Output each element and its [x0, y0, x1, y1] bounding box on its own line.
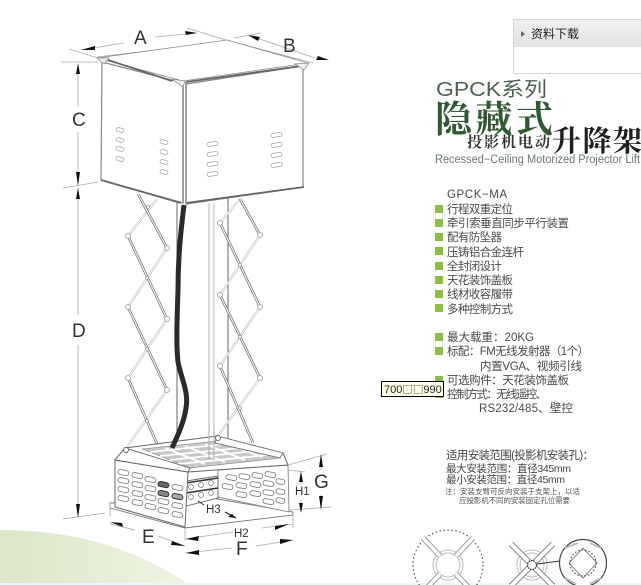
dimension lines: E, F, H2: F — [236, 539, 248, 560]
text block: installation range: 应投影机不同的安装固定孔位需要. — [459, 495, 572, 505]
left scissor lift arms — [125, 194, 170, 462]
right scissor lift arms — [217, 199, 262, 443]
text block: specifications: RS232/485、壁控 — [479, 401, 574, 415]
text block: specifications: 可选购件：天花装饰盖板 — [447, 373, 570, 387]
text block: feature list: 行程双重定位 — [447, 202, 513, 216]
bottom pale strip — [0, 583, 641, 585]
text block: feature list: 天花装饰盖板 — [447, 273, 514, 287]
projector base cage — [110, 436, 293, 541]
vent slots left wall — [117, 469, 183, 518]
label: dimension B: B — [283, 36, 296, 57]
dimension lines: E, F, H2: E — [142, 527, 155, 548]
dimension lines: G, H1, H3: H1 — [295, 486, 310, 498]
text block: installation range: 最小安装范围：直径45mm — [446, 473, 565, 486]
dimension line: C: C — [72, 110, 86, 131]
perforated top plate — [115, 436, 288, 472]
dimension lines: A and B — [69, 28, 329, 63]
panel: download tab — [514, 20, 641, 74]
label: dimension A: A — [134, 28, 147, 49]
right face — [186, 66, 303, 204]
text block: feature list — [435, 189, 569, 316]
dimension lines: E, F, H2: H2 — [234, 528, 249, 540]
projector housing box — [97, 40, 309, 204]
icon: minimum mounting range diagram — [511, 540, 606, 585]
text block: specifications — [435, 330, 589, 415]
text block: specifications: 内置VGA、视频引线 — [480, 359, 582, 373]
base plate — [110, 498, 293, 528]
text block: feature list: 牵引索垂直同步平行装置 — [447, 216, 569, 230]
heading: product title: 升降架 — [552, 125, 641, 158]
text block: installation range — [445, 448, 594, 505]
dimension line: D: D — [72, 321, 86, 342]
text block: specifications: 最大载重：20KG — [447, 330, 534, 344]
back wall — [218, 465, 289, 512]
column in front of base — [209, 425, 214, 460]
mounting flanges — [115, 448, 190, 472]
text block: feature list: 多种控制方式 — [447, 302, 514, 316]
dimension lines: E, F, H2 — [110, 522, 293, 560]
top face — [97, 40, 308, 81]
heading: product title — [435, 78, 641, 166]
dimension line: C — [61, 62, 98, 188]
panel: download tab: 资料下载 — [531, 27, 579, 41]
text block: feature list: 配有防坠器 — [447, 230, 502, 244]
green curved background — [0, 530, 188, 584]
text block: installation range: 最大安装范围：直径345mm — [446, 462, 571, 475]
dimension line: D — [63, 188, 105, 519]
text block: specifications: 控制方式：无线遥控、 — [447, 387, 547, 401]
heading: product title: GPCK系列 — [436, 78, 547, 101]
dimension lines: G, H1, H3 — [198, 454, 331, 518]
text block: feature list: 全封闭设计 — [447, 259, 502, 273]
text block: specifications: 标配：FM无线发射器（1个） — [447, 344, 589, 358]
icon: maximum mounting range diagram — [413, 530, 483, 585]
dimension lines: G, H1, H3: H3 — [206, 504, 221, 516]
vent slots — [116, 127, 282, 177]
left face — [101, 62, 183, 203]
text block: feature list: 线材收容履带 — [447, 287, 513, 301]
front-left wall — [115, 460, 188, 527]
heading: product title: 隐藏式 — [435, 99, 553, 141]
vent slots back wall — [222, 471, 285, 505]
text block: installation range: 注：安装支臂可反向安装于支架上，以适 — [445, 486, 580, 496]
text block: installation range: 适用安装范围(投影机安装孔)： — [446, 448, 594, 462]
heading: product title: 投影机电动 — [467, 133, 550, 151]
central guide column — [177, 198, 228, 455]
interior bracket rows — [186, 476, 218, 506]
text block: feature list: 压铸铝合金连杆 — [447, 245, 524, 259]
tooltip: 700□□990 — [384, 382, 442, 397]
text block: feature list: GPCK−MA — [447, 189, 508, 201]
cable drag chain — [172, 205, 187, 448]
dimension lines: G, H1, H3: G — [314, 472, 329, 493]
